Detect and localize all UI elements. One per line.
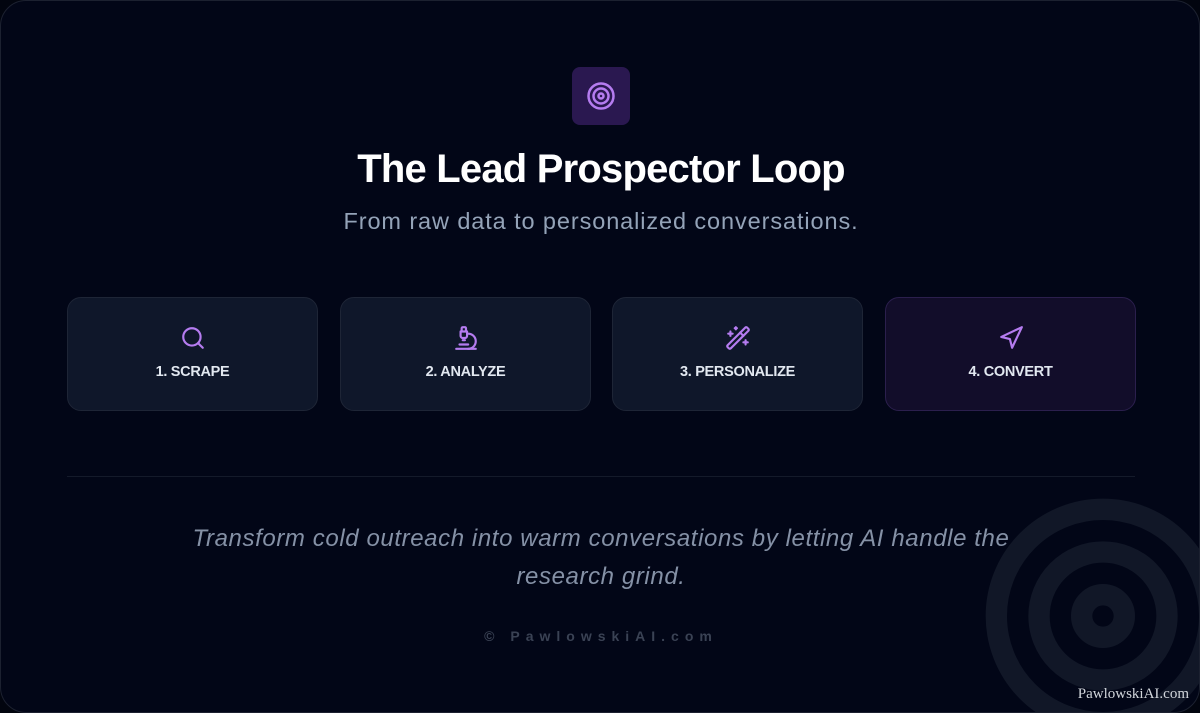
subtitle: From raw data to personalized conversations. (343, 208, 859, 234)
card: scrape (67, 297, 318, 411)
card: convert (885, 297, 1136, 411)
card: scrape: 1. SCRAPE (156, 364, 229, 380)
watermark: PawlowskiAI.com (1078, 686, 1189, 702)
tagline: Transform cold outreach into warm conversations by letting AI handle the research grind. (193, 525, 1009, 590)
icon: magic wand (726, 326, 750, 350)
card: personalize: 3. PERSONALIZE (680, 364, 795, 380)
icon: microscope (455, 326, 477, 350)
card: analyze: 2. ANALYZE (426, 364, 505, 380)
card: personalize (612, 297, 863, 411)
title: The Lead Prospector Loop (357, 147, 845, 191)
divider (67, 476, 1135, 477)
icon: send (1000, 326, 1023, 349)
card: analyze (340, 297, 591, 411)
card: convert: 4. CONVERT (968, 364, 1052, 380)
footer credit: © PawlowskiAI.com (484, 628, 718, 644)
background target decoration (986, 498, 1199, 712)
icon: search (182, 327, 204, 349)
icon: target badge (572, 67, 630, 125)
